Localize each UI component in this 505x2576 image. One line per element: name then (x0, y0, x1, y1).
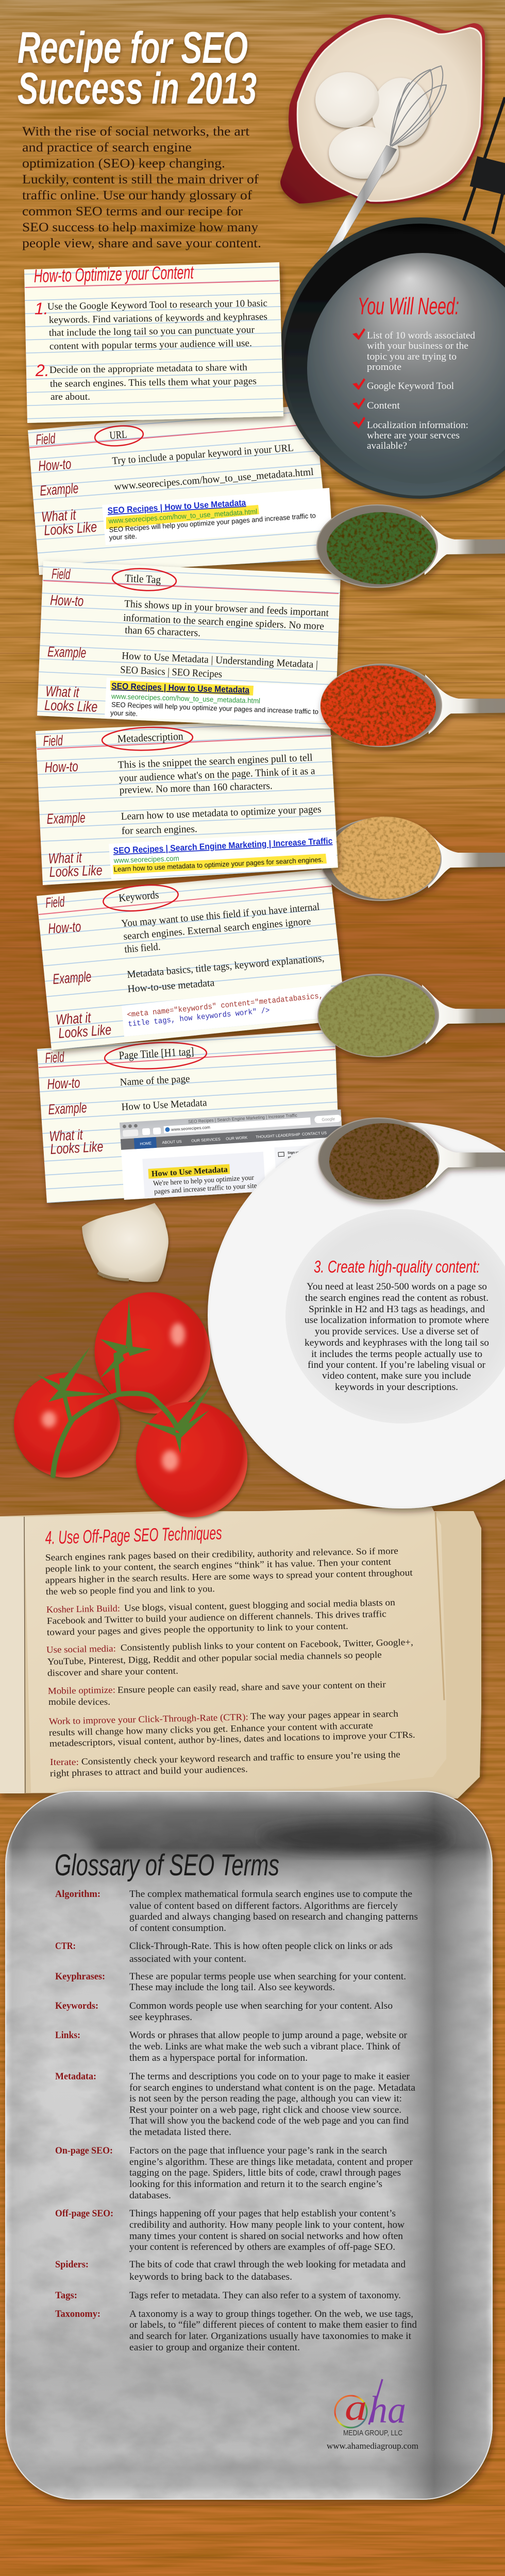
glossary: taxonomy: or labels, to “file” different pieces of content to make them easier to find (129, 2319, 417, 2330)
glossary: spiders: Spiders: (55, 2259, 89, 2270)
card: metadescription: Learn how to use metadata to optimize your pages (121, 804, 322, 822)
checklist: available? (367, 441, 407, 451)
glossary: links: Links: (55, 2030, 80, 2041)
glossary: algorithm: Algorithm: (55, 1889, 100, 1900)
card: page title (H1 tag): Example (48, 1099, 87, 1117)
metal tray (5, 1791, 493, 2500)
card: keywords: Metadata basics, title tags, keyword explanations, (127, 953, 325, 980)
intro paragraph: optimization (SEO) keep changing. (22, 157, 225, 171)
label: field circle (104, 1040, 207, 1071)
glossary: on-page SEO: Factors on the page that influence your page’s rank in the search (129, 2145, 388, 2156)
trivet (464, 97, 505, 234)
glossary: links: the web. Links are what make the web such a vibrant place. Think of (129, 2041, 401, 2052)
search result box: SEO Recipes | How to Use Metadata (111, 681, 250, 695)
card: title tag: SEO Basics | SEO Recipes (120, 664, 223, 680)
browser screenshot: OUR SERVICES (191, 1137, 221, 1143)
tomatoes (14, 1279, 257, 1526)
step 2: 2. (35, 361, 49, 380)
search result box: your site. (110, 709, 138, 718)
card: page title (H1 tag): Name of the page (120, 1073, 190, 1088)
search result box: your site. (109, 532, 137, 541)
intro paragraph: and practice of search engine (22, 141, 192, 155)
use social media: Use social media: (46, 1643, 116, 1655)
glossary: algorithm: The complex mathematical formula search engines use to compute the (129, 1889, 412, 1900)
glossary: links: them as a hyperspace portal for information. (129, 2053, 308, 2063)
checklist: where are your servces (367, 431, 460, 441)
glossary: spiders (55, 2259, 406, 2282)
glossary: taxonomy: A taxonomy is a way to group things together. On the web, we use tags, (129, 2309, 413, 2319)
spoon: paprika (321, 664, 505, 747)
card: keywords: Field (45, 893, 65, 911)
search result box: www.seorecipes.com/how_to_use_metadata.html (108, 507, 258, 525)
card: keywords: this field. (124, 941, 161, 955)
card: title tag: information to the search engine spiders. No more (123, 612, 324, 632)
kosher link build: Use blogs, visual content, guest blogging and social media blasts on (124, 1597, 395, 1613)
off-page intro: people link to your content, the search engines “think” it has value. Then your content (45, 1556, 391, 1574)
card: title tag: Title Tag (125, 572, 161, 586)
glossary: tags: Tags refer to metadata. They can also refer to a system of taxonomy. (129, 2290, 401, 2301)
intro paragraph: common SEO terms and our recipe for (22, 205, 243, 218)
logo: aha media group (327, 2379, 418, 2451)
mobile optimize (48, 1679, 386, 1707)
card: URL: www.seorecipes.com/how_to_use_metadata.html (114, 466, 314, 493)
browser screenshot: SEO Recipes | Search Engine Marketing | Increase Traffic (188, 1112, 298, 1124)
create content body: keywords in your descriptions. (335, 1382, 458, 1393)
browser screenshot: pages and increase traffic to your site. (154, 1182, 259, 1196)
card: page title (H1 tag) (37, 1029, 345, 1203)
glossary: links: Words or phrases that allow people to jump around a page, website or (129, 2030, 408, 2041)
off-page intro: the web so people find you and link to you. (46, 1583, 215, 1597)
garlic (82, 1203, 169, 1282)
glossary: algorithm: value of content based on different factors. Algorithms are fiercely (129, 1901, 398, 1911)
click-through-rate (49, 1708, 415, 1749)
glossary: CTR (55, 1941, 393, 1964)
card: metadescription: Field (43, 733, 63, 749)
intro paragraph: traffic online. Use our handy glossary of (22, 189, 252, 202)
step 1: keywords. Find variations of keywords and keyphrases (49, 311, 267, 326)
create content body: You need at least 250-500 words on a page so (307, 1282, 487, 1292)
glossary: keyphrases: Keyphrases: (55, 1971, 105, 1982)
browser screenshot: How to Use Metadata (152, 1165, 228, 1178)
spoon: caraway seeds (318, 1118, 505, 1200)
code box (122, 984, 332, 1037)
mobile optimize: Ensure people can easily read, share and save your content on their (117, 1679, 386, 1695)
glossary: keyphrases: These may include the long tail. Also see keywords. (129, 1982, 335, 1993)
spoon: olive herb powder (318, 974, 505, 1057)
card: keywords: What it (55, 1009, 92, 1028)
glossary: off-page SEO: credibility and authority. How many people link to your content, how (129, 2219, 405, 2230)
bowl with eggs and whisk base (280, 14, 485, 204)
checklist: Content (367, 401, 400, 411)
glossary: spiders: keywords to bring back to the databases. (129, 2272, 292, 2282)
card: metadescription: preview. No more than 160 characters. (119, 780, 273, 796)
glossary: taxonomy: Taxonomy: (55, 2309, 100, 2319)
create content body: use localization information to promote where (305, 1315, 489, 1326)
search result box: SEO Recipes will help you optimize your pages and increase traffic to (111, 701, 318, 716)
glossary: taxonomy: easier to group and organize their content. (129, 2342, 300, 2353)
glossary: off-page SEO (55, 2208, 405, 2252)
glossary: taxonomy: and search for later. Organizations usually have taxonomies to make it (129, 2331, 412, 2342)
code box: title tags, how keywords work" /> (128, 1006, 270, 1029)
kosher link build (46, 1597, 395, 1637)
search result box: www.seorecipes.com/how_to_use_metadata.html (111, 692, 260, 705)
spoon: ginger powder (321, 817, 505, 901)
card: metadescription: How-to (44, 758, 78, 775)
logo: aha media group: MEDIA GROUP, LLC (343, 2429, 402, 2437)
glossary: tags: Tags: (55, 2290, 77, 2301)
card: metadescription: What it (48, 850, 82, 867)
iterate: right phrases to attract and build your audiences. (50, 1764, 248, 1778)
label: URL circle (94, 424, 144, 448)
tomato vine (37, 1299, 212, 1476)
create content body: the search engines read the content as robust. (305, 1293, 489, 1303)
spoon: dill (317, 505, 505, 587)
logo: aha media group: www.ahamediagroup.com (327, 2441, 418, 2451)
glossary: keywords: see keyphrases. (129, 2012, 192, 2023)
card: metadescription (36, 717, 338, 885)
browser screenshot: ABOUT US (162, 1139, 182, 1145)
card: keywords: search engines. External search engines ignore (123, 916, 311, 942)
glossary: metadata: the metadata listed there. (129, 2127, 231, 2138)
main title: Success in 2013 (18, 64, 257, 113)
click-through-rate: Work to improve your Click-Through-Rate (CTR): (49, 1711, 248, 1727)
search result box: SEO Recipes | How to Use Metadata (107, 498, 246, 516)
browser screenshot: Subscribe (286, 1178, 300, 1182)
book (0, 1507, 481, 1799)
create content body: find your content. If you’re labeling visual or (308, 1360, 485, 1370)
browser screenshot: www.seorecipes.com (171, 1125, 210, 1132)
browser screenshot (120, 1109, 345, 1200)
browser screenshot: THOUGHT LEADERSHIP (256, 1132, 300, 1139)
glossary: on-page SEO: tagging on the page. Spiders, little bits of code, crawl through pages (129, 2167, 401, 2178)
card: keywords: You may want to use this field if you have internal (121, 901, 320, 929)
glossary: taxonomy (55, 2309, 417, 2353)
card: page title (H1 tag): How-to (47, 1075, 80, 1092)
step 1: 1. (35, 299, 48, 318)
glossary title: Glossary of SEO Terms (55, 1849, 279, 1882)
card: title tag: How-to (50, 592, 84, 609)
create content body: you provide services. Use a diverse set of (315, 1327, 479, 1337)
create content body: video content, make sure you include (322, 1371, 471, 1381)
create content body: Sprinkle in H2 and H3 tags as headings, and (309, 1304, 485, 1315)
search result box: www.seorecipes.com (113, 854, 179, 865)
step 2 (35, 361, 257, 402)
off-page heading: 4. Use Off-Page SEO Techniques (45, 1522, 222, 1548)
step 1: Use the Google Keyword Tool to research your 10 basic (47, 298, 267, 312)
glossary: metadata: is not seen by the person reading the page, although you can view it: (129, 2093, 402, 2104)
card: URL (28, 404, 332, 575)
glossary: metadata: That will show you the backend code of the web page and you can find (129, 2115, 409, 2126)
label: metadescription circle (102, 726, 193, 752)
checklist: List of 10 words associated (367, 331, 476, 341)
search result box (102, 488, 332, 545)
mobile optimize: mobile devices. (48, 1697, 110, 1707)
glossary: keyphrases: These are popular terms people use when searching for your content. (129, 1971, 406, 1982)
main title (18, 23, 257, 113)
card: title tag: Field (52, 566, 71, 582)
card: URL: What it (41, 506, 77, 525)
glossary: CTR: Click-Through-Rate. This is how often people click on links or ads (129, 1941, 393, 1952)
label: title tag circle (112, 567, 177, 592)
card: metadescription: for search engines. (122, 823, 197, 837)
card: metadescription: This is the snippet the search engines pull to tell (117, 752, 313, 771)
use social media: discover and share your content. (47, 1666, 178, 1678)
card: page title (H1 tag): What it (49, 1127, 83, 1144)
glossary: off-page SEO: Things happening off your pages that help establish your content’s (129, 2208, 396, 2219)
browser screenshot: CONTACT US (302, 1130, 327, 1137)
glossary: metadata: The terms and descriptions you code on to your page to make it easier (129, 2071, 410, 2082)
card: URL: URL (109, 428, 127, 442)
frying pan (279, 217, 505, 499)
code box: <meta name="keywords" content="metadatabasics, (127, 992, 324, 1020)
glossary: metadata (55, 2071, 416, 2138)
card: keywords: How-to-use metadata (127, 977, 215, 995)
glossary: algorithm: guarded and always changing based on research and changing patterns (129, 1911, 418, 1922)
glossary: metadata: Rest your pointer on a web page, right click and choose view source. (129, 2105, 401, 2115)
card: keywords (37, 869, 346, 1050)
card: URL: Looks Like (43, 519, 97, 538)
card: URL: Field (35, 430, 56, 448)
glossary: on-page SEO: engine’s algorithm. These are things like metadata, content and proper (129, 2157, 413, 2167)
card: title tag: Example (47, 643, 87, 661)
kosher link build: toward your pages and gives people the opportunity to link to your content. (47, 1621, 348, 1637)
card: title tag: This shows up in your browser and feeds important (124, 598, 329, 619)
kosher link build: Kosher Link Build: (46, 1603, 120, 1615)
checklist: Localization information: (367, 420, 468, 431)
card: title tag: What it (45, 683, 80, 700)
glossary: CTR: associated with your content. (129, 1954, 246, 1964)
glossary: off-page SEO: many times your content is shared on social networks and how often (129, 2231, 403, 2242)
glossary: on-page SEO: looking for this information and return it to the search engine’s (129, 2179, 382, 2190)
step 2: the search engines. This tells them what your pages (50, 376, 257, 389)
glossary: algorithm (55, 1889, 418, 1934)
browser screenshot: HOME (140, 1141, 152, 1146)
glossary: on-page SEO: databases. (129, 2190, 171, 2201)
browser screenshot: OUR WORK (226, 1135, 248, 1141)
how-to heading: How-to Optimize your Content (33, 261, 194, 286)
search result box (105, 677, 330, 721)
label: keywords circle (102, 882, 179, 914)
card: how-to optimize your content (24, 261, 283, 423)
card: page title (H1 tag): Page Title [H1 tag] (119, 1045, 194, 1062)
intro paragraph: Luckily, content is still the main driver of (22, 173, 259, 187)
use social media: Consistently publish links to your content on Facebook, Twitter, Google+, (121, 1637, 413, 1653)
glossary: algorithm: of content consumption. (129, 1923, 226, 1934)
create content body: keywords and keyphrases with the long tail so (305, 1338, 489, 1348)
intro paragraph: With the rise of social networks, the art (22, 125, 249, 139)
checklist: topic you are trying to (367, 352, 457, 362)
glossary: keyphrases (55, 1971, 406, 1993)
click-through-rate: metadescriptors, visual content, author by-lines, dates and locations to improve your CTRs. (49, 1730, 415, 1749)
intro paragraph: SEO success to help maximize how many (22, 221, 259, 234)
card: keywords: Example (52, 969, 92, 987)
glossary: off-page SEO: your content is referenced by others are examples of off-page SEO. (129, 2242, 395, 2252)
card: URL: Try to include a popular keyword in your URL (112, 442, 294, 467)
search result box (109, 831, 337, 879)
glossary: metadata: Metadata: (55, 2071, 96, 2082)
browser screenshot: Sign up for Content Ah (288, 1149, 324, 1155)
card: metadescription: Example (46, 809, 86, 827)
create content body: it includes the terms people actually use to (311, 1349, 482, 1360)
glossary: on-page SEO (55, 2145, 413, 2201)
card: keywords: Keywords (118, 888, 159, 904)
card: keywords: Looks Like (58, 1022, 112, 1041)
browser screenshot: Email Address (282, 1162, 305, 1166)
glossary: on-page SEO: On-page SEO: (55, 2145, 113, 2156)
glossary: CTR: CTR: (55, 1941, 76, 1952)
off-page intro (45, 1546, 413, 1597)
step 2: are about. (50, 392, 90, 402)
off-page intro: appears higher in the search results. Here are some ways to spread your content throughout (45, 1567, 413, 1585)
step 1 (35, 298, 267, 352)
off-page intro: Search engines rank pages based on their credibility, authority and relevance. So if more (45, 1546, 398, 1563)
create content body (305, 1282, 489, 1393)
main title: Recipe for SEO (18, 23, 248, 73)
glossary: keywords: Keywords: (55, 2001, 98, 2011)
iterate (50, 1749, 400, 1778)
plate (208, 1122, 505, 1509)
search result box: SEO Recipes | Search Engine Marketing | Increase Traffic (113, 836, 333, 856)
card: page title (H1 tag): Looks Like (50, 1139, 104, 1157)
glossary: links (55, 2030, 408, 2063)
card: title tag: How to Use Metadata | Understanding Metadata | (122, 650, 318, 670)
browser screenshot: Google (322, 1116, 335, 1122)
step 2: Decide on the appropriate metadata to share with (49, 362, 248, 376)
mobile optimize: Mobile optimize: (48, 1685, 115, 1696)
browser screenshot: We're here to help you optimize your (153, 1174, 255, 1188)
kosher link build: Facebook and Twitter to build your audience on different channels. This drives traffic (47, 1608, 386, 1626)
search result box: SEO Recipes will help you optimize your pages and increase traffic to (109, 512, 316, 534)
card: metadescription: your audience what's on the page. Think of it as a (119, 765, 315, 784)
iterate: Iterate: (50, 1757, 79, 1767)
card: page title (H1 tag): Field (45, 1049, 65, 1066)
glossary: keywords (55, 2001, 393, 2023)
card: page title (H1 tag): How to Use Metadata (121, 1097, 207, 1113)
whisk (317, 66, 446, 278)
use social media (46, 1637, 413, 1678)
checklist: with your business or the (367, 341, 468, 351)
card: metadescription: Metadescription (117, 730, 184, 745)
intro paragraph (22, 125, 261, 250)
card: title tag (37, 561, 341, 729)
use social media: YouTube, Pinterest, Digg, Reddit and other popular social media channels so people (47, 1649, 382, 1667)
step 1: that include the long tail so you can punctuate your (49, 325, 255, 338)
iterate: Consistently check your keyword research and traffic to ensure you’re using the (81, 1749, 400, 1767)
checklist: promote (367, 362, 401, 372)
search result box: Learn how to use metadata to optimize your pages for search engines. (113, 856, 324, 873)
glossary: keywords: Common words people use when searching for your content. Also (129, 2001, 393, 2011)
card: URL: How-to (38, 456, 72, 474)
logo: aha media group: a (345, 2387, 367, 2428)
glossary: spiders: The bits of code that crawl through the web looking for metadata and (129, 2259, 406, 2270)
glossary: metadata: for search engines to understand what content is on the page. Metadata (129, 2082, 416, 2093)
browser screenshot: strategy newsletter (288, 1154, 318, 1160)
intro paragraph: people view, share and save your content. (22, 236, 261, 250)
click-through-rate: The way your pages appear in search (250, 1708, 398, 1721)
card: title tag: than 65 characters. (125, 624, 201, 639)
card: title tag: Looks Like (44, 697, 98, 715)
checklist (352, 328, 476, 451)
click-through-rate: results will change how many clicks you get. Enhance your content with accurate (49, 1720, 373, 1738)
card: keywords: How-to (47, 919, 81, 937)
eggs (315, 72, 430, 179)
glossary: off-page SEO: Off-page SEO: (55, 2208, 113, 2219)
logo: aha media group: ha (369, 2389, 406, 2431)
checklist: Google Keyword Tool (367, 381, 454, 392)
card: URL: Example (39, 480, 79, 499)
card: metadescription: Looks Like (49, 862, 103, 880)
step 1: content with popular terms your audience will use. (49, 338, 252, 352)
